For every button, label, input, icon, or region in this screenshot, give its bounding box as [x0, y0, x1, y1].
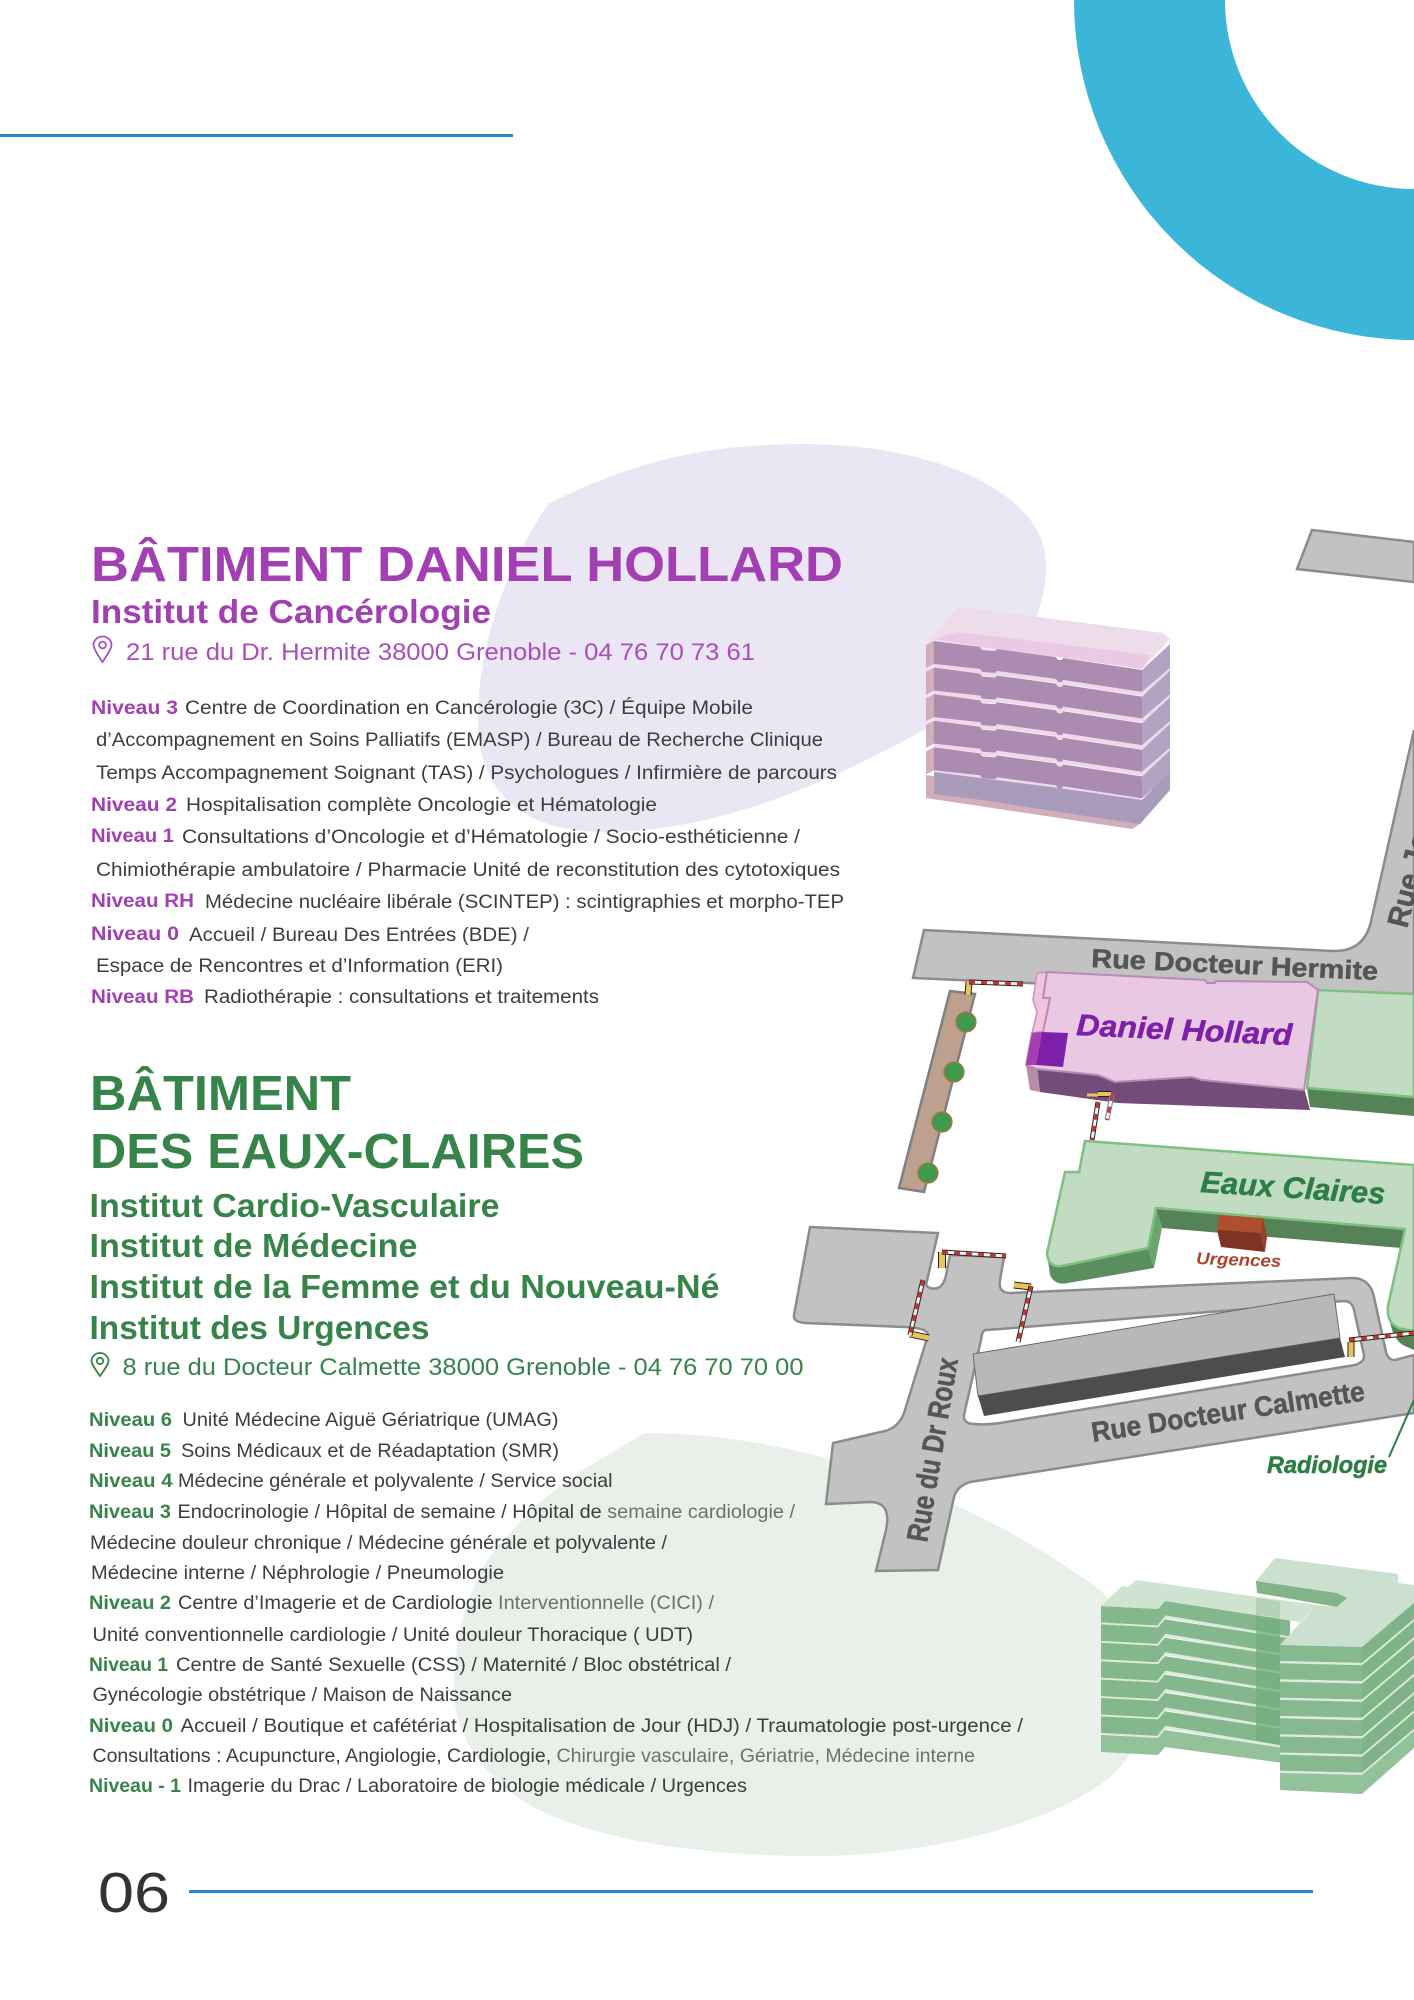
level 3: Médecine douleur chronique / Médecine générale et polyvalente /: [90, 1533, 668, 1554]
panel: campus map: [794, 530, 1414, 1571]
level 0: [89, 1716, 1024, 1767]
label: Rue du Dr Roux: Rue du Dr Roux: [901, 1355, 965, 1544]
level 0: Espace de Rencontres et d’Information (ERI): [96, 956, 503, 977]
level 6: Unité Médecine Aiguë Gériatrique (UMAG): [182, 1410, 558, 1431]
barrier 3: [942, 1252, 1006, 1268]
level 1: Consultations d’Oncologie et d’Hématologie / Socio-esthéticienne /: [182, 827, 801, 848]
list: Eaux-Claires levels: [89, 1410, 1024, 1797]
heading: Bâtiment des Eaux-Claires: DES EAUX-CLAIRES: [90, 1125, 584, 1179]
page number: 06: [98, 1861, 170, 1925]
barrier 1: [968, 982, 1023, 995]
label: Eaux Claires: Eaux Claires: [1200, 1166, 1386, 1211]
barrier 6: [1349, 1333, 1414, 1357]
building: green connector: [1307, 990, 1414, 1116]
footer rule: [189, 1890, 1313, 1893]
level 1: [89, 1655, 732, 1706]
illustration: Eaux Claires floors: [1101, 1558, 1414, 1794]
level 1: Gynécologie obstétrique / Maison de Naissance: [92, 1685, 512, 1706]
green background blob: [454, 1433, 1142, 1856]
level 3: Endocrinologie / Hôpital de semaine / Hôpital de semaine cardiologie /: [178, 1502, 796, 1523]
callout: Radiologie: Radiologie: [1267, 1452, 1387, 1479]
address: Eaux-Claires: 8 rue du Docteur Calmette 38000 Grenoble - 04 76 70 70 00: [122, 1354, 804, 1381]
level -1: Imagerie du Drac / Laboratoire de biologie médicale / Urgences: [188, 1776, 747, 1797]
callout: Radiologie: [1267, 1400, 1414, 1479]
list: Daniel Hollard levels: [91, 698, 844, 1008]
building: Eaux Claires footprint: [1047, 1141, 1414, 1350]
level 1: Niveau 1: [91, 826, 174, 847]
level 1: [91, 826, 840, 881]
level RB: Radiothérapie : consultations et traitements: [204, 987, 599, 1008]
level 6: Niveau 6: [89, 1410, 172, 1431]
subheadings: institutes: Institut de Médecine: [90, 1227, 418, 1264]
level 3: Temps Accompagnement Soignant (TAS) / Psychologues / Infirmière de parcours: [96, 763, 837, 784]
parking building: [973, 1294, 1345, 1416]
decorative ring top right: [1074, 0, 1414, 340]
level 4: Niveau 4: [89, 1471, 173, 1492]
level RH: Médecine nucléaire libérale (SCINTEP) : scintigraphies et morpho-TEP: [205, 892, 844, 913]
level 2: Niveau 2: [89, 1593, 171, 1614]
heading: Bâtiment des Eaux-Claires: BÂTIMENT: [90, 1066, 351, 1121]
subheading: Institut de Cancérologie: Institut de Cancérologie: [91, 593, 491, 630]
level 3: Niveau 3: [89, 1502, 171, 1523]
icon: green location pin: [92, 1353, 108, 1376]
level 2: Centre d’Imagerie et de Cardiologie Interventionnelle (CICI) /: [178, 1593, 715, 1614]
level -1: Niveau - 1: [89, 1776, 181, 1797]
level 1: Chimiothérapie ambulatoire / Pharmacie Unité de reconstitution des cytotoxiques: [96, 860, 840, 881]
level 3: Centre de Coordination en Cancérologie (3C) / Équipe Mobile: [185, 698, 753, 719]
purple background blob: [478, 444, 1046, 832]
subheadings: institutes: [90, 1187, 720, 1346]
level 3: Médecine interne / Néphrologie / Pneumologie: [91, 1563, 504, 1584]
label: Daniel Hollard: Daniel Hollard: [1076, 1009, 1294, 1052]
barrier 2: [1087, 1094, 1112, 1140]
subheadings: institutes: Institut des Urgences: [90, 1309, 430, 1346]
building: Daniel Hollard footprint: [1026, 972, 1318, 1110]
level 5: Soins Médicaux et de Réadaptation (SMR): [181, 1441, 559, 1462]
level 0: Niveau 0: [89, 1716, 173, 1737]
level 2: [89, 1593, 715, 1646]
illustration: Daniel Hollard floors: [926, 607, 1170, 829]
level 0: [91, 924, 530, 977]
level 1: Niveau 1: [89, 1655, 168, 1676]
subheadings: institutes: Institut Cardio-Vasculaire: [90, 1187, 500, 1224]
level 0: Accueil / Bureau Des Entrées (BDE) /: [189, 925, 530, 946]
heading: Bâtiment Daniel Hollard: BÂTIMENT DANIEL HOLLARD: [91, 537, 843, 592]
brown strip with trees: [899, 991, 976, 1192]
level 0: Consultations : Acupuncture, Angiologie, Cardiologie, Chirurgie vasculaire, Gériatrie, Médecine interne: [92, 1746, 975, 1767]
heading: Bâtiment des Eaux-Claires: [90, 1066, 584, 1179]
barrier 5: [1014, 1285, 1031, 1342]
label: Rue Docteur Calmette: Rue Docteur Calmette: [1089, 1376, 1367, 1448]
barrier 4: [910, 1280, 929, 1338]
level 5: Niveau 5: [89, 1441, 171, 1462]
level 4: Médecine générale et polyvalente / Service social: [178, 1471, 612, 1492]
level 0: Niveau 0: [91, 924, 179, 945]
road: Rue Docteur Hermite: [913, 730, 1414, 1000]
level 3: Niveau 3: [91, 698, 178, 719]
icon: purple location pin: [94, 636, 112, 662]
Urgences entrance block: [1217, 1215, 1267, 1252]
address: Daniel Hollard: 21 rue du Dr. Hermite 38000 Grenoble - 04 76 70 73 61: [126, 639, 755, 666]
level 2: Unité conventionnelle cardiologie / Unité douleur Thoracique ( UDT): [92, 1625, 693, 1646]
road: top right fragment: [1297, 530, 1414, 582]
level 2: Niveau 2: [91, 795, 177, 816]
level 0: Accueil / Boutique et cafétériat / Hospitalisation de Jour (HDJ) / Traumatologie post-urgence /: [180, 1716, 1024, 1737]
road: lower network: [794, 1227, 1414, 1571]
label: Urgences: Urgences: [1196, 1249, 1281, 1271]
level 3: d’Accompagnement en Soins Palliatifs (EMASP) / Bureau de Recherche Clinique: [96, 730, 823, 751]
label: Rue Docteur Hermite: Rue Docteur Hermite: [1091, 943, 1379, 986]
level RB: Niveau RB: [91, 987, 194, 1008]
level RH: Niveau RH: [91, 891, 194, 912]
level 3: [89, 1502, 796, 1584]
subheadings: institutes: Institut de la Femme et du Nouveau-Né: [90, 1268, 720, 1305]
level 3: [91, 698, 837, 784]
level 2: Hospitalisation complète Oncologie et Hématologie: [186, 795, 657, 816]
top rule: [0, 134, 513, 137]
level 1: Centre de Santé Sexuelle (CSS) / Maternité / Bloc obstétrical /: [176, 1655, 732, 1676]
